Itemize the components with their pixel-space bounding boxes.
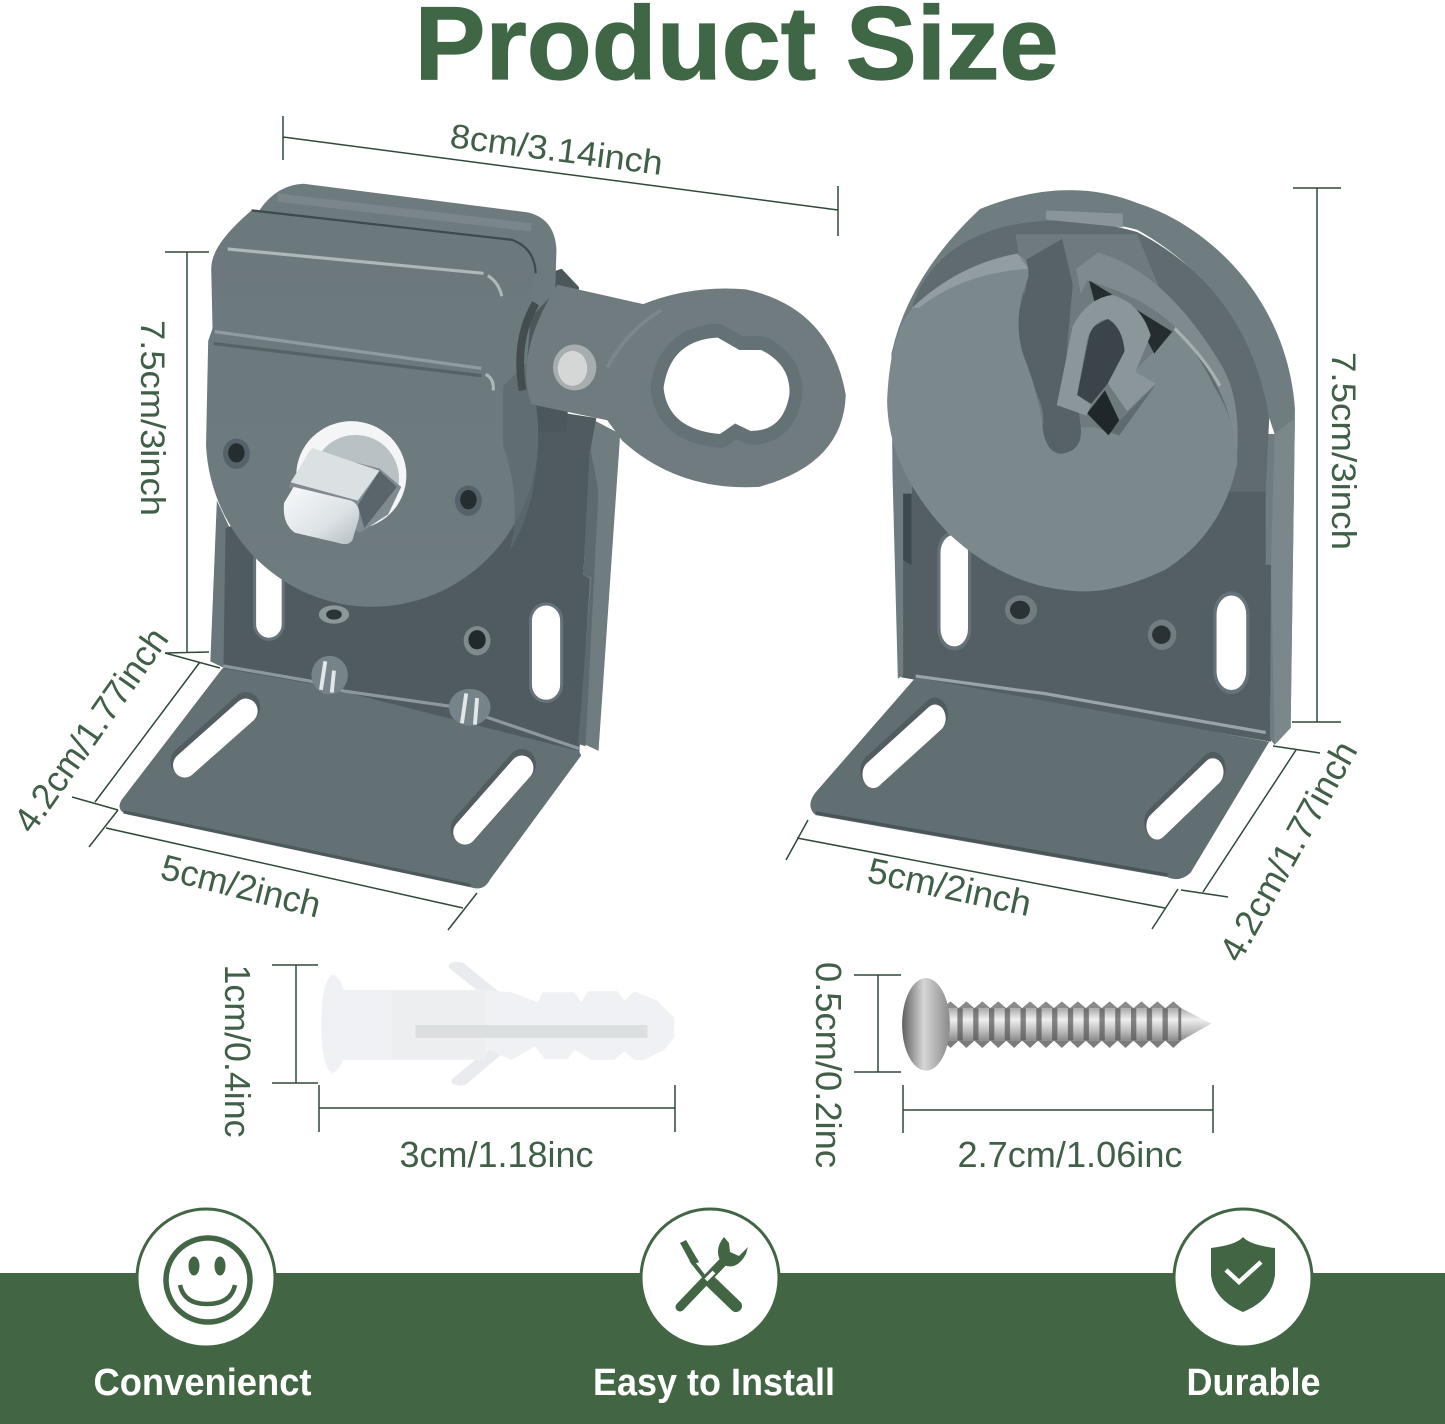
plate slots — [255, 537, 562, 701]
rotating disc — [887, 255, 1237, 592]
housing front shell — [206, 210, 538, 607]
right bracket: idler end — [810, 190, 1295, 879]
dimension: screw height: 0.5cm/0.2inc — [808, 962, 849, 1168]
dimension: top width 8cm: 8cm/3.14inch — [448, 117, 665, 183]
label: Easy to Install — [593, 1362, 835, 1404]
housing back layer — [245, 184, 556, 317]
dimension: screw length — [903, 1085, 1213, 1175]
dimension: left height 7.5cm: 7.5cm/3inch — [133, 320, 171, 516]
retaining clip — [1057, 295, 1156, 416]
pan head screw — [902, 978, 1211, 1071]
foot plate — [810, 677, 1269, 879]
icon: crossed tools — [641, 1209, 779, 1347]
plate slots — [939, 533, 1248, 692]
feature: easy to install — [593, 1209, 835, 1404]
foot slots — [185, 707, 522, 832]
wall anchor — [321, 966, 674, 1081]
label: Durable — [1186, 1362, 1320, 1404]
bottom banner — [0, 1273, 1445, 1424]
housing screw holes — [223, 439, 482, 516]
dimension: anchor length: 3cm/1.18inc — [400, 1134, 594, 1175]
label: Convenienct — [94, 1362, 312, 1404]
inner drum — [912, 220, 1269, 491]
adjuster arm and ring outer — [526, 285, 846, 487]
dimension: left foot width 5cm: 5cm/2inch — [157, 846, 325, 925]
dimension: top width 8cm — [283, 116, 838, 236]
dimension: right foot width 5cm — [786, 820, 1178, 929]
plate holes — [319, 605, 491, 655]
dimension: anchor height: 1cm/0.4inc — [217, 964, 258, 1138]
plate — [901, 436, 1271, 742]
plate holes — [1005, 595, 1176, 650]
hex stud — [284, 421, 406, 544]
dimension: right height 7.5cm — [1292, 188, 1362, 722]
arched flanged frame — [891, 190, 1295, 745]
arm screw — [553, 344, 596, 390]
notch background — [1016, 234, 1176, 446]
ring hole — [664, 338, 789, 434]
housing highlights — [214, 249, 502, 390]
keyhole recess — [1018, 239, 1081, 454]
right flange — [579, 418, 620, 751]
dimension: screw height — [808, 962, 901, 1168]
housing side shade — [503, 363, 538, 551]
welds — [311, 656, 491, 726]
dimension: anchor length — [319, 1085, 675, 1175]
foot slots — [873, 714, 1213, 826]
ring grooves — [607, 310, 661, 367]
top tab — [1046, 210, 1123, 227]
arm collar — [520, 303, 536, 390]
icon: smiley — [137, 1209, 275, 1347]
plate shadow behind arm — [523, 269, 579, 432]
feature: durable — [1174, 1209, 1320, 1404]
dimension: left foot width 5cm — [89, 810, 477, 930]
dimension: right depth 4.2cm: 4.2cm/1.77inch — [1211, 734, 1365, 968]
left flange — [210, 501, 230, 668]
dimension: right foot width 5cm: 5cm/2inch — [864, 849, 1035, 924]
left bracket: crank mechanism — [120, 184, 846, 889]
feature: convenient — [94, 1209, 312, 1404]
dimension: right height 7.5cm: 7.5cm/3inch — [1324, 352, 1362, 550]
retaining clip band — [1076, 253, 1238, 455]
ring inner flat — [664, 338, 789, 434]
dimension: left height 7.5cm — [133, 252, 209, 653]
dimension: anchor height — [217, 964, 318, 1138]
dimension: screw length: 2.7cm/1.06inc — [958, 1134, 1182, 1175]
clip shadows — [1089, 280, 1172, 354]
dimension: left depth 4.2cm: 4.2cm/1.77inch — [5, 620, 176, 840]
back plate — [223, 409, 596, 758]
icon: shield check — [1174, 1209, 1312, 1347]
foot plate — [120, 668, 581, 889]
